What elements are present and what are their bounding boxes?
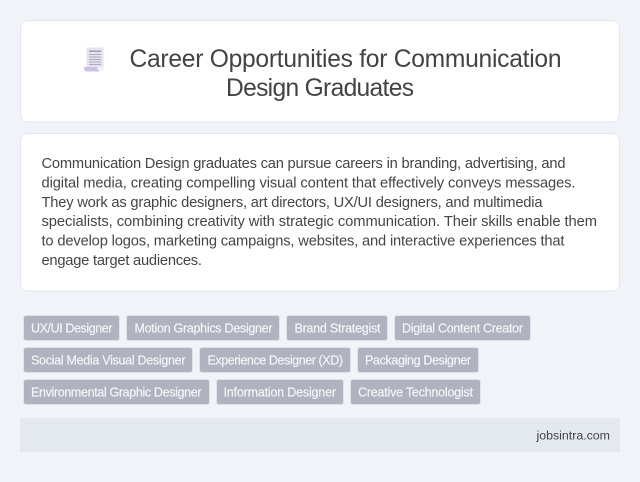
tag: Brand Strategist	[286, 316, 388, 340]
tag: Digital Content Creator	[394, 316, 530, 340]
tag: Social Media Visual Designer: Social Media Visual Designer	[31, 353, 186, 367]
tag: Social Media Visual Designer	[24, 348, 192, 372]
tag: Motion Graphics Designer	[126, 316, 280, 340]
tag: Packaging Designer: Packaging Designer	[365, 353, 471, 367]
tag: Motion Graphics Designer: Motion Graphics Designer	[134, 321, 272, 335]
footer source: jobsintra.com	[536, 428, 610, 442]
tag: Information Designer: Information Designer	[224, 385, 336, 399]
career tags	[24, 316, 530, 404]
description text: engage target audiences.	[42, 253, 202, 269]
tag: Packaging Designer	[358, 348, 478, 372]
tag: Environmental Graphic Designer: Environmental Graphic Designer	[31, 385, 202, 399]
description text: digital media, creating compelling visual content that effectively conveys messages.	[42, 175, 576, 191]
panel: description card	[20, 134, 620, 291]
description text: Communication Design graduates can pursue careers in branding, advertising, and	[42, 156, 566, 172]
tag: Experience Designer (XD)	[200, 348, 350, 372]
icon: paper scroll	[84, 48, 104, 72]
footer bar	[20, 418, 620, 452]
tag: Experience Designer (XD): Experience Designer (XD)	[208, 353, 343, 367]
description text	[42, 156, 597, 269]
description text: to develop logos, marketing campaigns, websites, and interactive experiences that	[42, 234, 564, 250]
title	[130, 46, 562, 102]
tag: Information Designer	[216, 380, 344, 404]
title: Design Graduates	[226, 75, 414, 102]
tag: Creative Technologist: Creative Technologist	[358, 385, 474, 399]
title: Career Opportunities for Communication	[130, 46, 562, 73]
panel: header card	[20, 20, 620, 122]
description text: They work as graphic designers, art directors, UX/UI designers, and multimedia	[42, 195, 543, 211]
tag: UX/UI Designer	[24, 316, 120, 340]
description text: specialists, combining creativity with strategic communication. Their skills enable them	[42, 214, 597, 230]
tag: UX/UI Designer: UX/UI Designer	[31, 321, 112, 335]
tag: Brand Strategist: Brand Strategist	[294, 321, 381, 335]
tag: Environmental Graphic Designer	[24, 380, 210, 404]
tag: Creative Technologist	[350, 380, 480, 404]
tag: Digital Content Creator: Digital Content Creator	[402, 321, 523, 335]
